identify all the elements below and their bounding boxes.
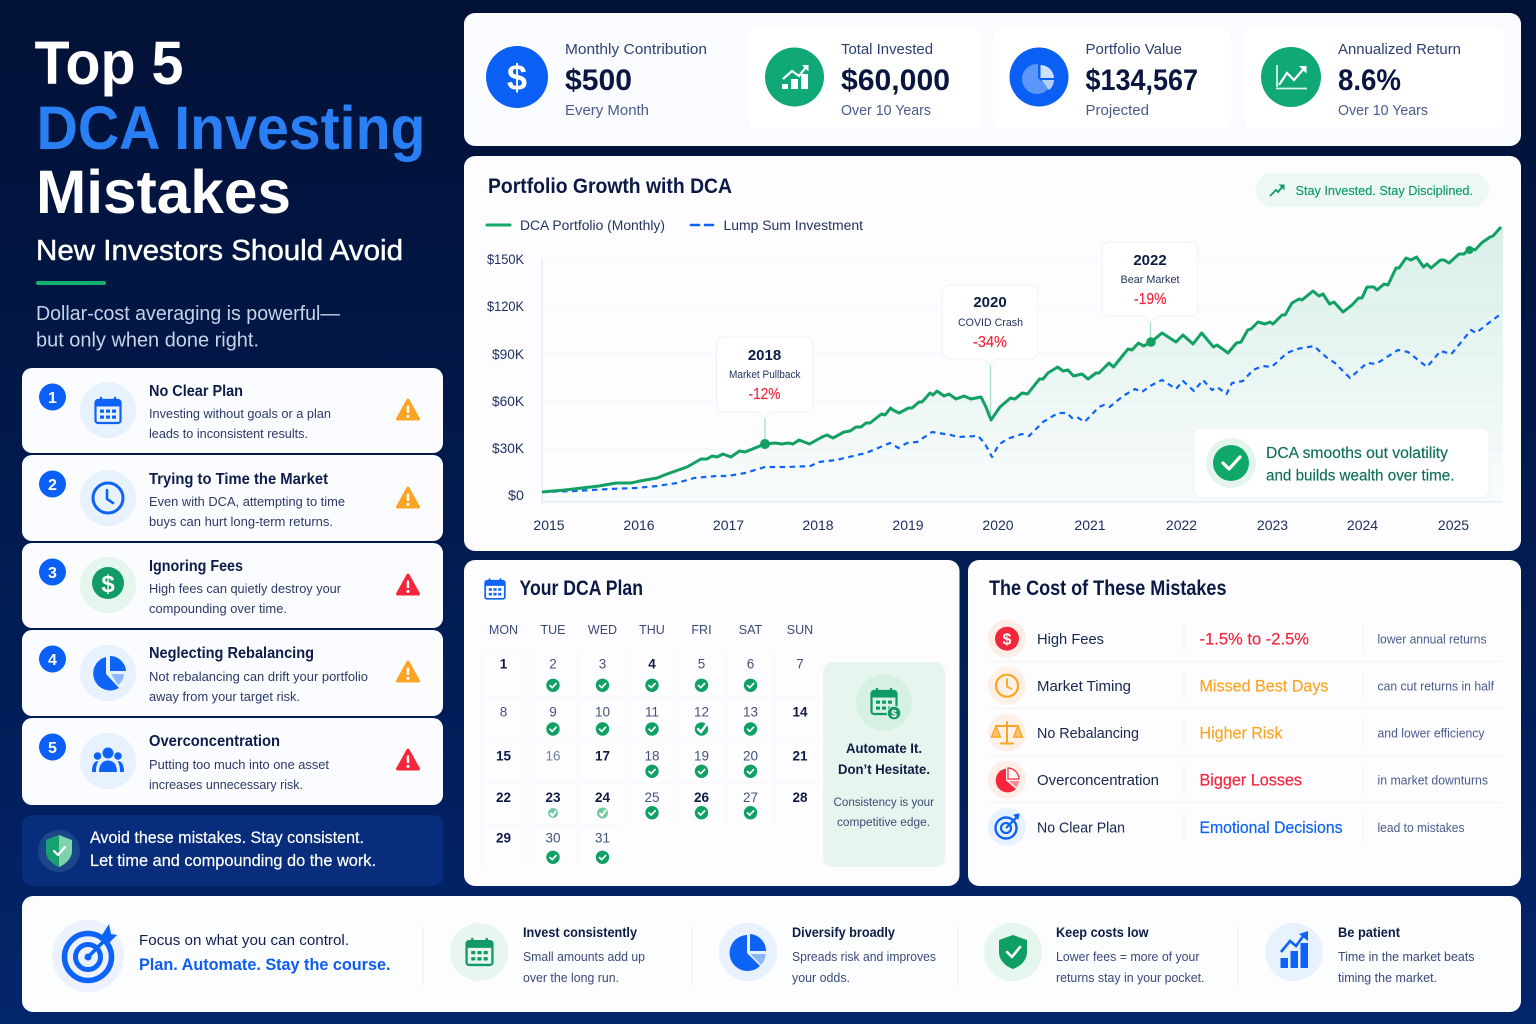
panel: mistake 3: compounding over time. [149,601,287,616]
title block: DCA Investing [36,94,426,162]
row: market timing: can cut returns in half [1378,678,1494,694]
title block: New Investors Should Avoid [36,235,403,267]
calendar grid [496,656,808,864]
row: high fees: $ [1003,632,1012,648]
title block: Mistakes [36,158,291,226]
calendar grid: 6 [747,656,754,672]
y axis labels: $90K [492,346,525,362]
panel: mistake 4: Neglecting Rebalancing [149,645,314,662]
stat: portfolio value: $134,567 [1086,64,1198,97]
weekday headers: FRI [691,623,712,637]
calendar grid: 12 [694,704,709,720]
tip: diversify broadly [719,923,936,985]
row: high fees: lower annual returns [1378,632,1486,646]
stat: total invested: Total Invested [841,41,933,58]
y axis labels: $60K [492,393,525,409]
focus message with target icon: Focus on what you can control. [139,932,349,949]
focus message with target icon [52,920,390,992]
panel: mistake 3: 3 [48,565,57,582]
calendar grid: 18 [644,748,660,764]
stat: portfolio value [1010,41,1198,119]
panel: mistake 5: 5 [48,740,57,757]
chart legend: DCA Portfolio (Monthly) [520,218,665,234]
row: no clear plan: Emotional Decisions [1200,819,1342,837]
callout: avoid these mistakes: Let time and compounding do the work. [90,851,376,870]
row: market timing [988,667,1494,705]
calendar grid: 5 [698,656,705,672]
x axis labels: 2024 [1347,517,1378,533]
panel: mistake 4 [22,630,443,716]
callout: DCA smooths out volatility: and builds wealth over time. [1266,468,1454,484]
tip: keep costs low: Keep costs low [1056,925,1149,940]
badge: stay invested [1256,173,1489,207]
calendar grid: 22 [496,790,511,805]
calendar grid: 8 [500,704,507,720]
calendar grid: 26 [694,790,709,805]
calendar grid: 20 [743,748,758,764]
tip: diversify broadly: Diversify broadly [792,925,895,940]
callout: avoid these mistakes: Avoid these mistakes. Stay consistent. [90,828,364,847]
callout: 2020: COVID Crash [958,317,1023,329]
title block: Top 5 [34,29,184,97]
focus message with target icon: Plan. Automate. Stay the course. [139,955,390,974]
chart legend [487,218,863,234]
x axis labels: 2022 [1166,517,1197,533]
panel: mistake 1: leads to inconsistent results. [149,426,308,441]
stat: monthly contribution: $ [507,57,527,98]
x axis labels: 2023 [1257,517,1288,533]
calendar grid: 24 [595,790,610,805]
title block: but only when done right. [36,328,259,352]
panel: mistake 2: Even with DCA, attempting to time [149,494,345,509]
calendar grid: 13 [743,704,758,720]
row: overconcentration [988,761,1488,799]
calendar grid: 17 [595,748,610,764]
weekday headers: SAT [739,623,763,637]
stat: portfolio value: Portfolio Value [1086,41,1182,58]
panel: mistake 5 [22,718,443,805]
panel: mistake 4: Not rebalancing can drift your portfolio [149,669,368,684]
calendar grid: 27 [743,790,758,805]
stat: annualized return: 8.6% [1338,64,1401,97]
tip: invest consistently: over the long run. [523,970,619,985]
row: overconcentration: Overconcentration [1037,772,1159,789]
DCA portfolio line [542,227,1501,492]
badge: stay invested: Stay Invested. Stay Disciplined. [1296,183,1473,198]
calendar grid: 2 [549,656,557,672]
x axis labels: 2025 [1438,517,1469,533]
callout: 2022: -19% [1134,291,1167,308]
row: high fees: -1.5% to -2.5% [1200,630,1309,648]
tip: be patient: timing the market. [1338,970,1437,985]
stat: annualized return: Annualized Return [1338,41,1461,58]
panel: mistake 2: Trying to Time the Market [149,471,328,488]
calendar grid: 19 [694,748,709,764]
row: no rebalancing: Higher Risk [1200,724,1283,742]
tip: invest consistently: Invest consistently [523,925,637,940]
row: market timing: Market Timing [1037,678,1131,695]
callout: 2018 [716,337,813,449]
tip: be patient [1265,923,1475,985]
panel: mistake 2 [22,455,443,541]
weekday headers: WED [588,623,617,637]
x axis labels [533,517,1469,533]
tip: keep costs low: returns stay in your pocket. [1056,970,1204,985]
calendar grid: 15 [496,748,511,764]
stat: monthly contribution: Every Month [565,102,649,119]
callout: automate it [823,662,945,867]
title block [34,29,426,352]
panel: mistake 3: $ [101,571,115,598]
callout: 2018: 2018 [748,347,781,364]
row: overconcentration: Bigger Losses [1200,772,1302,790]
callout: 2022 [1102,242,1198,347]
callout: automate it: $ [891,709,897,720]
panel: mistake 1 [22,368,443,453]
callout: 2018: -12% [748,386,781,403]
panel: cost of mistakes [968,560,1521,886]
panel: mistake 4: 4 [48,652,57,669]
panel: mistake 5: increases unnecessary risk. [149,777,303,792]
panel: mistake 2: 2 [48,477,57,494]
y axis labels: $30K [492,440,525,456]
panel: mistake 5: Overconcentration [149,733,280,750]
x axis labels: 2016 [623,517,655,533]
tip: be patient: Time in the market beats [1338,949,1475,964]
row: no clear plan: No Clear Plan [1037,820,1125,836]
panel: mistake 3: High fees can quietly destroy your [149,581,342,596]
row: no rebalancing: No Rebalancing [1037,725,1139,742]
calendar grid: 31 [595,830,610,846]
panel: mistake 5: Putting too much into one asset [149,757,329,772]
tip: diversify broadly: Spreads risk and improves [792,949,936,964]
calendar grid: 11 [645,704,659,720]
calendar grid: 25 [644,790,660,805]
callout: avoid these mistakes [22,815,443,886]
callout: 2018: Market Pullback [729,369,801,381]
row: no clear plan [988,808,1464,846]
x axis labels: 2019 [892,517,924,533]
tip: keep costs low: Lower fees = more of your [1056,949,1200,964]
row: no rebalancing: and lower efficiency [1378,726,1485,740]
callout: automate it: Don’t Hesitate. [838,761,930,777]
stat: total invested [765,41,950,119]
callout: 2022: 2022 [1133,252,1167,269]
icon: plan calendar [485,579,505,599]
tip: diversify broadly: your odds. [792,970,850,985]
stat: portfolio value: Projected [1086,102,1149,119]
row: no clear plan: lead to mistakes [1378,820,1464,835]
row: overconcentration: in market downturns [1378,772,1488,788]
calendar grid: 9 [549,704,557,720]
panel: bottom tips strip [22,896,1521,1012]
stat: monthly contribution: Monthly Contribution [565,41,707,58]
callout: DCA smooths out volatility [1194,428,1489,498]
tip: keep costs low [984,923,1204,985]
panel: mistake 1: No Clear Plan [149,383,243,400]
row: market timing: Missed Best Days [1200,678,1328,696]
weekday headers [489,623,813,637]
calendar grid: 14 [792,704,808,720]
stat: annualized return [1261,41,1461,119]
weekday headers: THU [639,623,665,637]
row: high fees [988,620,1486,658]
panel: mistake 1: 1 [48,390,57,407]
stat: total invested: $60,000 [841,64,950,97]
weekday headers: SUN [787,623,813,637]
callout: automate it: competitive edge. [837,815,930,829]
panel: key stats [464,13,1521,146]
panel: mistake 3 [22,543,443,628]
calendar grid: 16 [545,748,561,764]
calendar grid: 3 [599,656,606,672]
row: no rebalancing [988,714,1485,752]
stat: monthly contribution: $500 [565,64,632,97]
y axis labels: $150K [487,251,525,267]
weekday headers: TUE [540,623,566,637]
calendar grid: 23 [545,790,561,805]
panel: portfolio growth chart [464,156,1521,551]
callout: 2020 [942,285,1038,415]
stat: annualized return: Over 10 Years [1338,102,1428,119]
y axis labels: $120K [487,298,525,314]
panel: your DCA plan [464,560,960,886]
callout: 2020: -34% [973,334,1007,351]
callout: automate it: Consistency is your [834,795,934,809]
panel: mistake 3: Ignoring Fees [149,558,243,575]
title block: Dollar-cost averaging is powerful— [36,302,340,325]
calendar grid: 21 [792,748,808,764]
callout: 2022: Bear Market [1120,274,1180,286]
calendar grid: 7 [796,656,804,672]
y axis labels [487,251,525,503]
panel: mistake 1: Investing without goals or a plan [149,406,331,421]
chart legend: Lump Sum Investment [724,218,863,234]
area under DCA line [542,227,1503,502]
tip: invest consistently [450,923,645,985]
calendar grid: 29 [496,830,511,846]
plan heading: Your DCA Plan [520,577,643,600]
calendar grid: 30 [545,830,561,846]
x axis labels: 2020 [982,517,1014,533]
row: high fees: High Fees [1037,631,1104,648]
panel: mistake 2: buys can hurt long-term returns. [149,514,333,529]
panel: mistake 4: away from your target risk. [149,689,300,704]
weekday headers: MON [489,623,518,637]
calendar grid: 4 [648,656,656,672]
x axis labels: 2017 [713,517,744,533]
y axis labels: $0 [508,487,524,503]
callout: automate it: Automate It. [846,740,922,756]
calendar grid: 10 [595,704,610,720]
x axis labels: 2015 [533,517,565,533]
tip: be patient: Be patient [1338,925,1400,940]
cost heading: The Cost of These Mistakes [989,577,1226,600]
calendar grid: 1 [500,656,508,672]
callout: 2020: 2020 [973,294,1007,311]
calendar grid: 28 [792,790,808,805]
lump sum line [542,313,1502,492]
stat: total invested: Over 10 Years [841,102,931,119]
stat: monthly contribution [486,41,707,119]
tip: invest consistently: Small amounts add up [523,949,645,964]
x axis labels: 2021 [1074,517,1106,533]
callout: DCA smooths out volatility: DCA smooths out volatility [1266,445,1448,462]
chart title: Portfolio Growth with DCA [488,175,732,198]
x axis labels: 2018 [802,517,834,533]
